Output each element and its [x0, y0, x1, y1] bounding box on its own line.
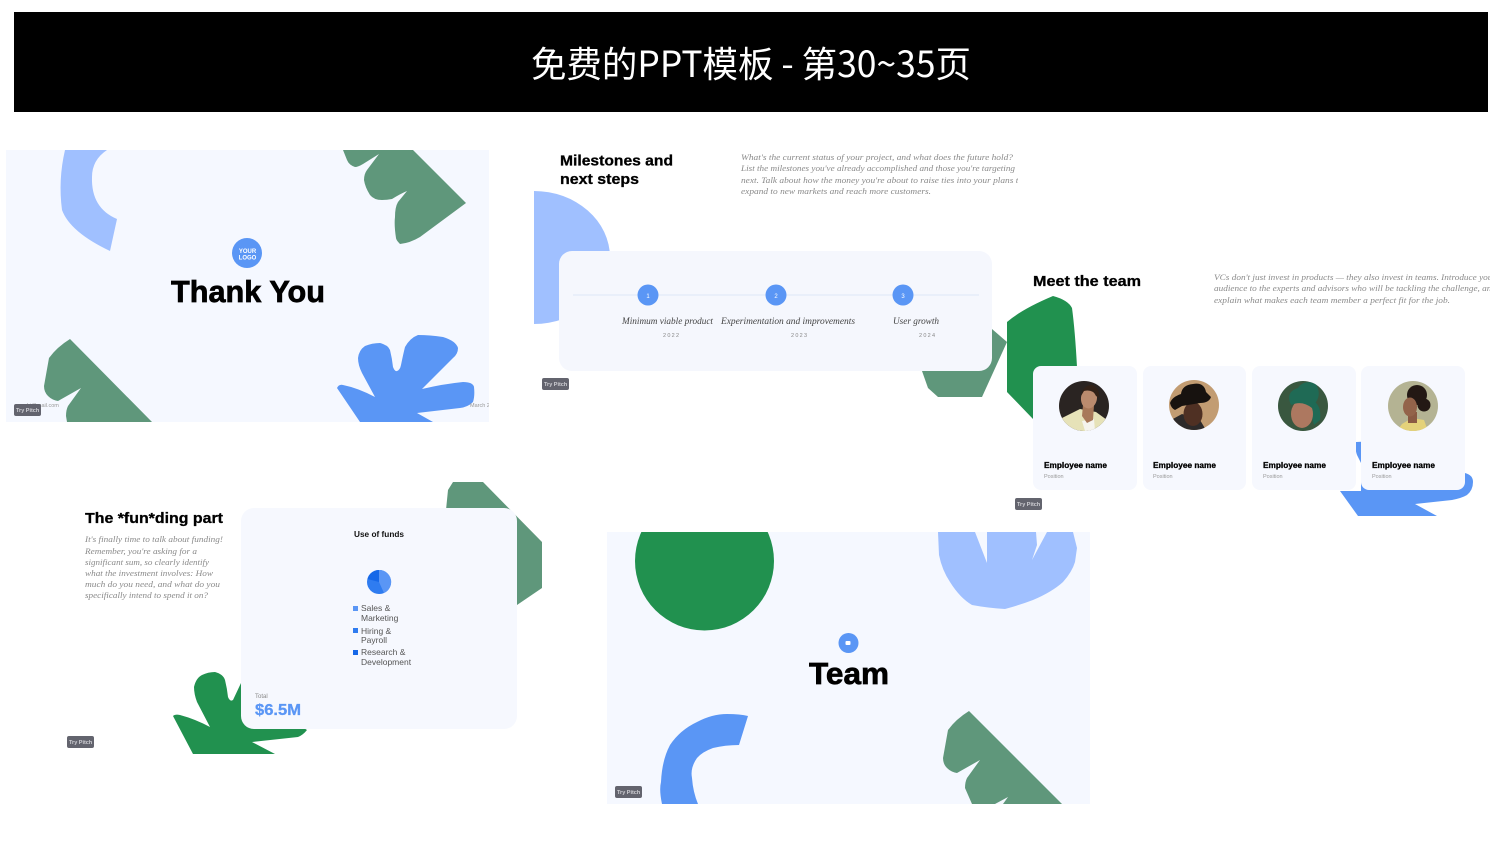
team card 2: [1143, 366, 1246, 490]
shape: green leaf bottom left: [173, 672, 307, 754]
shape: green leaf bottom left: [44, 339, 152, 422]
description text: significant sum, so clearly identify: [85, 557, 209, 567]
try pitch badge: [14, 404, 41, 416]
total figure: [255, 694, 301, 719]
milestone 1: 2022: [663, 333, 679, 339]
legend: Hiring &: [361, 626, 392, 636]
shape: blue arc: [660, 714, 748, 804]
heading: milestones: next steps: [560, 171, 639, 188]
description text: what the investment involves: How: [85, 568, 213, 578]
pie chart: [367, 570, 391, 594]
shape: light blue semicircle: [534, 191, 610, 324]
milestone 2: Experimentation and improvements: [720, 316, 856, 326]
panel: thank you slide: [6, 150, 490, 422]
footer text right: March 2: [470, 403, 490, 409]
team card 1: Employee name: [1044, 461, 1108, 470]
description text: What's the current status of your project, and what does the future hold?: [741, 152, 1014, 162]
try pitch badge: [1015, 498, 1042, 510]
try pitch badge: [542, 378, 569, 390]
team card 3: Employee name: [1263, 461, 1327, 470]
description text: explain what makes each team member a perfect fit for the job.: [1214, 295, 1450, 305]
description text: specifically intend to spend it on?: [85, 590, 209, 600]
heading: meet the team: Meet the team: [1033, 273, 1141, 290]
team card 4: Employee name: [1372, 461, 1436, 470]
try pitch badge: [615, 786, 642, 798]
logo badge: LOGO: [239, 256, 257, 262]
milestone 2: 2023: [791, 333, 807, 339]
team card 2: Position: [1153, 474, 1173, 480]
heading: team: Team: [809, 656, 889, 691]
chart heading: Use of funds: [354, 530, 405, 539]
description text: next. Talk about how the money you're about to raise ties into your plans to: [741, 175, 1023, 185]
total figure: Total: [255, 694, 268, 700]
team card 1: Position: [1044, 474, 1064, 480]
avatar 2: [1169, 380, 1219, 431]
description text: much do you need, and what do you: [85, 579, 220, 589]
try pitch badge: Try Pitch: [544, 382, 568, 388]
panel: team slide: [607, 492, 1090, 804]
team card 1: [1033, 366, 1137, 490]
total figure: $6.5M: [255, 702, 301, 719]
milestone 1: [621, 284, 714, 339]
description text: It's finally time to talk about funding!: [84, 534, 223, 544]
try pitch badge: Try Pitch: [1017, 502, 1041, 508]
logo badge: [838, 633, 858, 653]
shape: green circle: [635, 492, 774, 630]
legend: Sales &: [361, 603, 391, 613]
shape: green leaf top right: [343, 150, 466, 244]
shape: green leaf top right: [446, 482, 542, 605]
heading: milestones: [560, 152, 673, 188]
try pitch badge: Try Pitch: [617, 790, 641, 796]
avatar 4: [1388, 381, 1438, 431]
legend: Payroll: [361, 635, 387, 645]
avatar 3: [1278, 381, 1328, 431]
milestone 3: 2024: [919, 333, 935, 339]
milestone 1: Minimum viable product: [621, 316, 714, 326]
milestone 3: User growth: [893, 316, 940, 326]
title banner: 免费的PPT模板 - 第30~35页: [531, 36, 971, 88]
team card 4: [1361, 366, 1465, 490]
timeline card: [559, 251, 992, 371]
title banner: [14, 12, 1488, 112]
heading: funding: The *fun*ding part: [85, 510, 223, 527]
shape: light blue arc: [61, 150, 117, 251]
shape: blue leaf bottom right: [337, 335, 474, 422]
description text: audience to the experts and advisors who will be tackling the challenge, and: [1214, 283, 1497, 293]
description text: VCs don't just invest in products — they also invest in teams. Introduce your: [1214, 272, 1497, 282]
heading: milestones: Milestones and: [560, 152, 673, 170]
footer text left: hi@mail.com: [27, 403, 59, 409]
try pitch badge: Try Pitch: [16, 408, 40, 414]
panel: funding slide: [67, 482, 542, 754]
try pitch badge: [67, 736, 94, 748]
avatar 1: [1059, 381, 1109, 431]
description text: List the milestones you've already accomplished and those you're targeting: [740, 163, 1015, 173]
description text: [740, 152, 1023, 196]
logo badge: [232, 238, 262, 268]
shape: green leaf behind card: [922, 329, 1007, 397]
milestone 2: 2: [774, 294, 778, 300]
team card 2: Employee name: [1153, 461, 1217, 470]
team card 4: Position: [1372, 474, 1392, 480]
shape: green blob: [1007, 296, 1077, 419]
legend: [353, 603, 412, 667]
milestone 3: [892, 284, 940, 339]
panel: milestones slide: [534, 154, 1018, 397]
shape: light blue leaf: [938, 532, 1077, 609]
description text: Remember, you're asking for a: [84, 546, 197, 556]
description text: [1214, 272, 1497, 305]
shape: green leaf: [943, 711, 1062, 804]
milestone 2: [720, 284, 856, 339]
heading: thank you: Thank You: [171, 274, 325, 309]
try pitch badge: Try Pitch: [69, 740, 93, 746]
milestone 3: 3: [901, 294, 905, 300]
funds card: [241, 508, 517, 729]
team card 3: Position: [1263, 474, 1283, 480]
legend: Research &: [361, 647, 406, 657]
shape: blue leaf: [1340, 440, 1473, 516]
legend: Marketing: [361, 613, 399, 623]
milestone 1: 1: [646, 294, 650, 300]
description text: expand to new markets and reach more customers.: [741, 186, 931, 196]
team card 3: [1252, 366, 1356, 490]
panel: meet the team slide: [1007, 272, 1497, 516]
description text: [84, 534, 223, 600]
legend: Development: [361, 657, 412, 667]
logo badge: YOUR: [239, 249, 257, 255]
